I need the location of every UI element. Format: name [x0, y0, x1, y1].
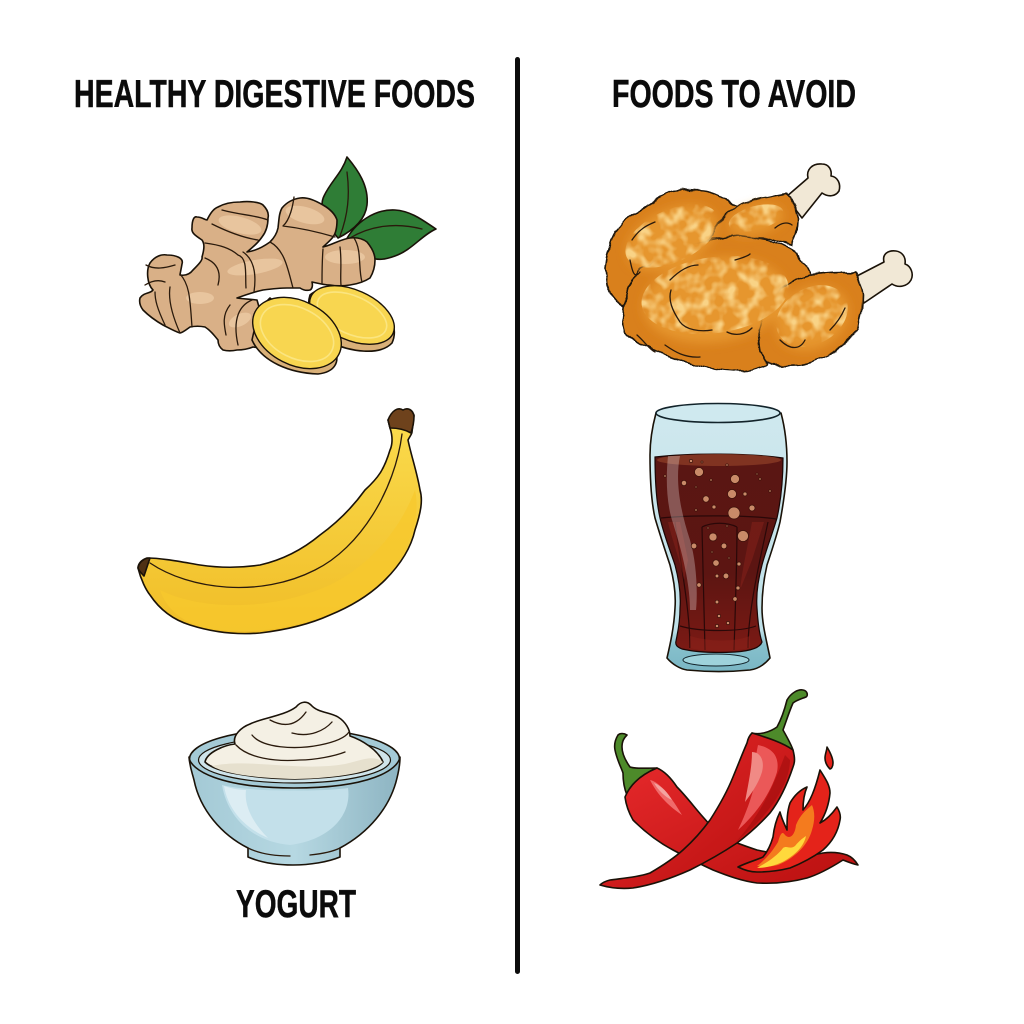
- icon: cola glass: [650, 404, 787, 672]
- cola foam band: [657, 454, 781, 466]
- icon: ginger root with leaves: [140, 157, 436, 383]
- ginger slice back: [301, 274, 403, 356]
- ginger ring lines: [145, 197, 362, 345]
- cola panel glow: [668, 522, 764, 651]
- glass body: [650, 413, 787, 672]
- chicken bones: [786, 164, 912, 303]
- chicken crust creases: [630, 222, 845, 357]
- glass foot ellipse: [683, 654, 749, 666]
- glass highlight: [667, 456, 697, 610]
- yogurt swirl lines: [236, 712, 349, 760]
- ginger highlights: [186, 202, 365, 331]
- banana ridge line: [150, 434, 402, 588]
- heading: foods to avoid: FOODS TO AVOID: [612, 73, 856, 116]
- icon: chili peppers and flame: [600, 690, 858, 888]
- left chili highlight: [650, 780, 682, 815]
- banana tip: [138, 558, 150, 576]
- yogurt shading: [212, 758, 383, 779]
- chicken mid tone: [617, 192, 860, 363]
- chicken mottled crust highlights: [616, 191, 859, 359]
- banana stem cap: [388, 409, 414, 433]
- cola liquid: [655, 454, 783, 652]
- bowl highlight: [222, 785, 348, 845]
- ginger leaves: [322, 157, 436, 259]
- cola lower glass panels: [661, 516, 776, 650]
- ginger slice front: [241, 283, 353, 383]
- ginger root body: [140, 198, 375, 351]
- glass rim: [656, 404, 780, 422]
- chicken crust pieces: [605, 190, 863, 372]
- center divider: [515, 57, 520, 974]
- icon: yogurt bowl: [189, 702, 400, 865]
- label: yogurt: YOGURT: [236, 883, 356, 926]
- icon: banana: [138, 409, 421, 634]
- banana shaded underside: [160, 490, 417, 631]
- heading: healthy digestive foods: HEALTHY DIGESTIVE FOODS: [74, 73, 475, 116]
- bubbles: [664, 459, 771, 628]
- right chili stem: [752, 690, 807, 750]
- icon: fried chicken: [605, 164, 912, 372]
- yogurt mound: [205, 702, 383, 779]
- left chili stem: [615, 734, 657, 795]
- bowl inner rim: [198, 737, 390, 783]
- flame: [738, 747, 840, 872]
- bowl rim back: [190, 729, 400, 789]
- right chili body: [600, 733, 794, 888]
- right chili highlight: [738, 745, 778, 830]
- left chili body: [625, 768, 858, 883]
- bowl body: [189, 757, 400, 865]
